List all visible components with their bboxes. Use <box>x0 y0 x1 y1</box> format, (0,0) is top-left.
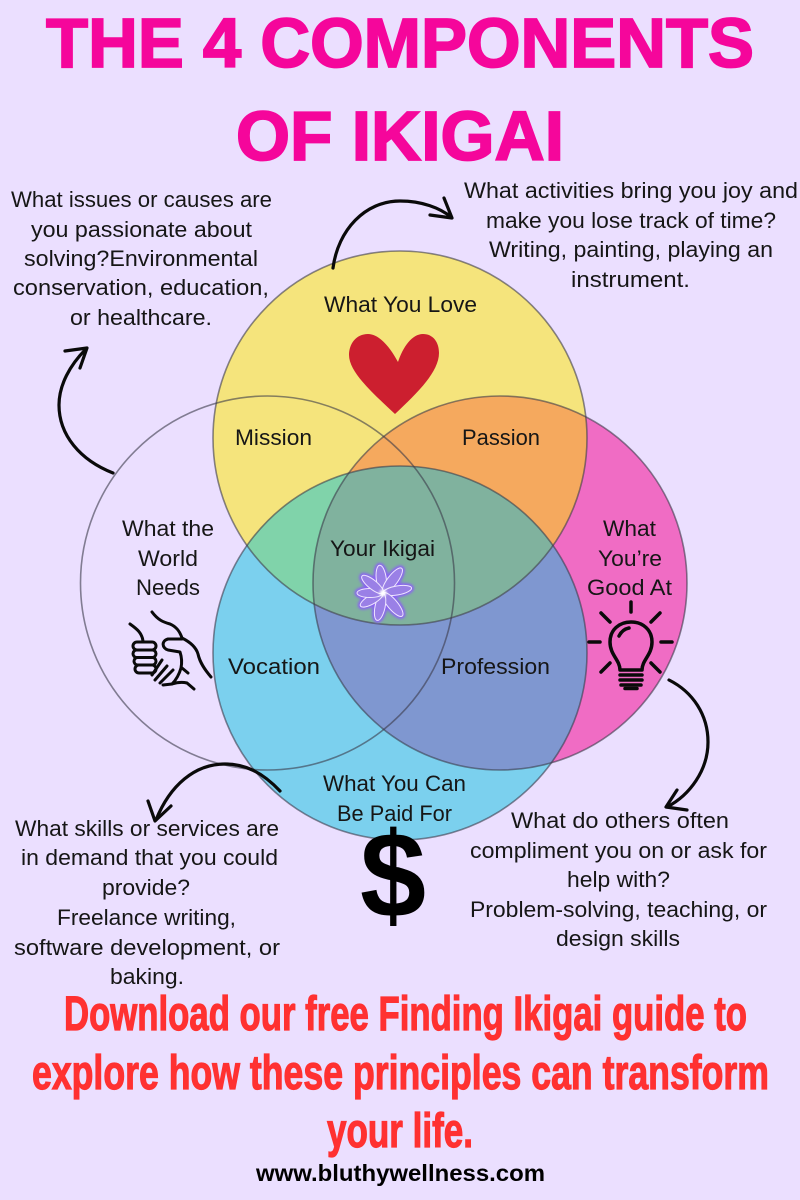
text block: skills: What skills or services are <box>15 816 279 841</box>
circle labels: Passion <box>462 425 540 450</box>
text block: causes: you passionate about <box>31 217 252 242</box>
text block: compliments: compliment you on or ask for <box>470 838 767 863</box>
circle labels: Needs <box>136 575 200 600</box>
arrow: world needs to causes text <box>59 348 113 473</box>
circle labels: Your Ikigai <box>330 536 435 561</box>
icon: heart <box>349 334 439 414</box>
overlap: passion <box>350 396 587 545</box>
text block: compliments: design skills <box>556 926 680 951</box>
circle labels: What <box>603 516 656 541</box>
text block: skills: software development, or <box>14 935 280 960</box>
text block: causes: conservation, education, <box>13 275 269 300</box>
overlap: yellow and blue <box>247 466 552 625</box>
arrow: paid for to skills text <box>148 764 280 821</box>
call to action: your life. <box>327 1105 473 1158</box>
text block: causes <box>11 187 272 330</box>
text block: compliments: help with? <box>567 867 670 892</box>
text block: activities: Writing, painting, playing an <box>489 237 773 262</box>
overlap: profession <box>314 546 587 770</box>
text block: causes: solving?Environmental <box>24 246 258 271</box>
text block: compliments <box>470 808 767 951</box>
arrow: good at to compliments text <box>666 680 708 810</box>
circle: what you love <box>213 251 587 625</box>
circle labels: Profession <box>441 654 550 679</box>
text block: activities: What activities bring you joy and <box>464 178 798 203</box>
text block: skills: baking. <box>110 964 184 989</box>
circle labels <box>122 292 672 826</box>
text block: activities: make you lose track of time? <box>486 208 776 233</box>
icon: flower <box>357 565 412 621</box>
text block: compliments: What do others often <box>511 808 729 833</box>
circle labels: Good At <box>587 575 672 600</box>
circle labels: World <box>138 546 198 571</box>
text block: compliments: Problem-solving, teaching, or <box>470 897 767 922</box>
circle labels: What the <box>122 516 214 541</box>
website url: www.bluthywellness.com <box>255 1160 545 1186</box>
text block: activities <box>464 178 798 292</box>
text block: causes: What issues or causes are <box>11 187 272 212</box>
icon: handshake <box>130 612 211 689</box>
title <box>46 4 754 175</box>
text block: skills: in demand that you could <box>21 845 278 870</box>
circle labels: You’re <box>598 546 662 571</box>
title: THE 4 COMPONENTS <box>46 4 754 82</box>
title: OF IKIGAI <box>236 97 564 175</box>
arrow: love to joy text <box>333 198 452 268</box>
circle labels: Be Paid For <box>337 801 452 826</box>
text block: activities: instrument. <box>571 267 690 292</box>
icon: dollar sign: $ <box>360 807 426 943</box>
circle labels: Mission <box>235 425 312 450</box>
overlap: your ikigai <box>313 466 552 625</box>
circle: what you can be paid for <box>213 466 587 840</box>
text block: skills: Freelance writing, <box>57 905 236 930</box>
venn diagram <box>80 251 687 840</box>
icon: lightbulb <box>589 602 672 688</box>
circle labels: What You Can <box>323 771 466 796</box>
circle labels: Vocation <box>228 654 320 679</box>
circle outlines <box>80 251 687 840</box>
text block: causes: or healthcare. <box>70 305 212 330</box>
call to action <box>32 988 769 1158</box>
text block: skills: provide? <box>102 875 190 900</box>
circle labels: What You Love <box>324 292 477 317</box>
circle: what you're good at <box>313 396 687 770</box>
text block: skills <box>14 816 280 989</box>
